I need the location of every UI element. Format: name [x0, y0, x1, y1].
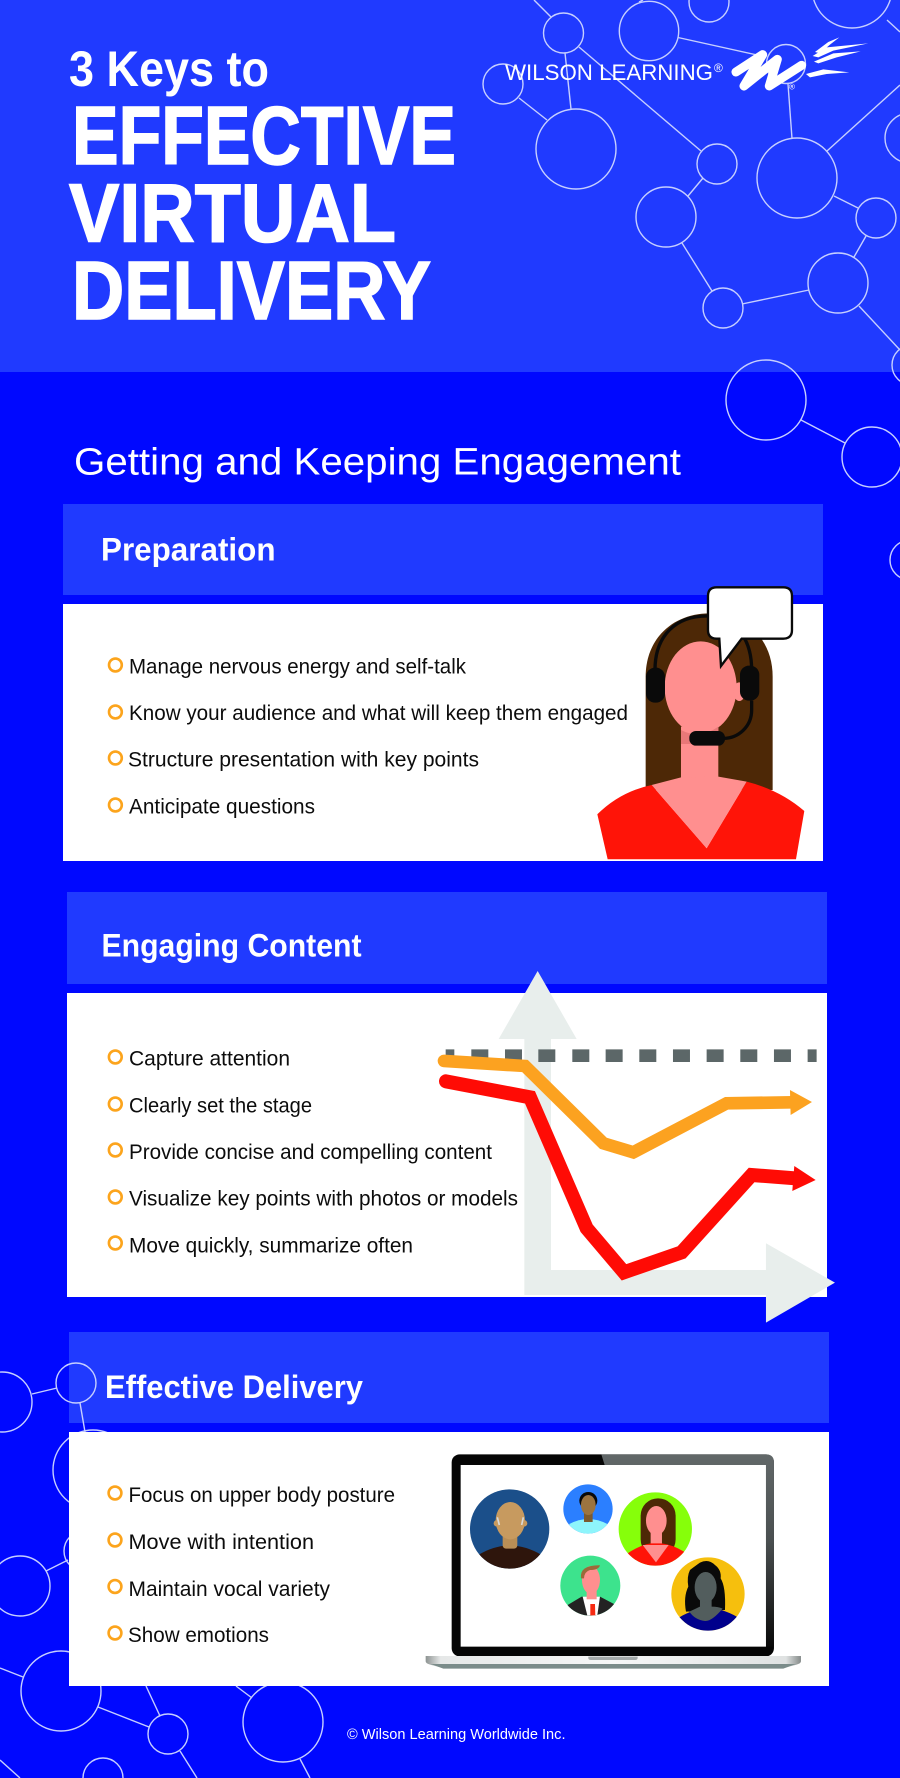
network pattern: top right — [483, 0, 900, 580]
engaging content list: Clearly set the stage — [129, 1094, 312, 1117]
engaging content list: Visualize key points with photos or models — [129, 1188, 518, 1211]
orange trend line — [444, 1061, 812, 1152]
preparation list: Manage nervous energy and self-talk — [129, 655, 466, 678]
panel: effective delivery — [69, 1432, 829, 1686]
footer copyright: © Wilson Learning Worldwide Inc. — [347, 1726, 566, 1743]
title: 3 Keys to — [69, 41, 269, 97]
effective delivery list — [128, 1484, 395, 1647]
icon: W brush mark: ® — [789, 82, 795, 91]
avatar: man in blue — [563, 1484, 613, 1534]
title: EFFECTIVE — [72, 89, 456, 182]
effective delivery list: Show emotions — [128, 1624, 269, 1647]
logo: Wilson Learning: ® — [714, 61, 723, 75]
logo: Wilson Learning: WILSON LEARNING — [505, 60, 713, 85]
title: DELIVERY — [72, 244, 431, 337]
speech bubble — [708, 587, 792, 666]
avatar: woman in red — [618, 1492, 692, 1566]
effective delivery list: Move with intention — [128, 1531, 314, 1554]
header: Preparation — [63, 504, 823, 595]
red trend line — [446, 1081, 816, 1272]
chart axes arrows — [499, 971, 835, 1323]
title band — [0, 0, 900, 372]
engaging content list — [129, 1048, 518, 1257]
engaging content list: Provide concise and compelling content — [129, 1141, 492, 1164]
preparation list — [128, 655, 628, 818]
panel: preparation — [63, 587, 823, 861]
title — [69, 41, 456, 337]
illustration: presenter with headset — [597, 587, 804, 859]
effective delivery bullets — [109, 1487, 121, 1639]
header: Engaging Content — [67, 892, 827, 984]
header: Preparation: Preparation — [101, 532, 276, 568]
preparation list: Structure presentation with key points — [128, 749, 479, 772]
header: Effective Delivery: Effective Delivery — [105, 1369, 363, 1405]
title: VIRTUAL — [69, 166, 396, 260]
avatar: bald man — [470, 1489, 550, 1569]
preparation list: Anticipate questions — [129, 795, 315, 818]
engaging content list: Move quickly, summarize often — [129, 1234, 413, 1257]
target dashed line — [446, 1049, 817, 1062]
avatar: man in suit — [560, 1556, 620, 1616]
header: Engaging Content: Engaging Content — [102, 928, 362, 964]
icon: W brush mark — [736, 37, 868, 91]
effective delivery list: Maintain vocal variety — [128, 1578, 330, 1601]
section heading: Getting and Keeping Engagement — [74, 442, 681, 484]
logo: Wilson Learning — [505, 37, 868, 91]
chart: declining engagement lines — [444, 971, 835, 1323]
avatar: woman with curly hair — [670, 1556, 747, 1633]
illustration: laptop with video call — [426, 1454, 801, 1669]
effective delivery list: Focus on upper body posture — [128, 1484, 395, 1507]
engaging content bullets — [109, 1051, 122, 1249]
preparation list: Know your audience and what will keep them engaged — [129, 702, 628, 725]
engaging content list: Capture attention — [129, 1048, 290, 1071]
panel: engaging content — [67, 971, 835, 1323]
header: Effective Delivery — [69, 1332, 829, 1423]
preparation bullets — [109, 659, 122, 811]
network pattern: bottom left — [0, 1363, 323, 1778]
